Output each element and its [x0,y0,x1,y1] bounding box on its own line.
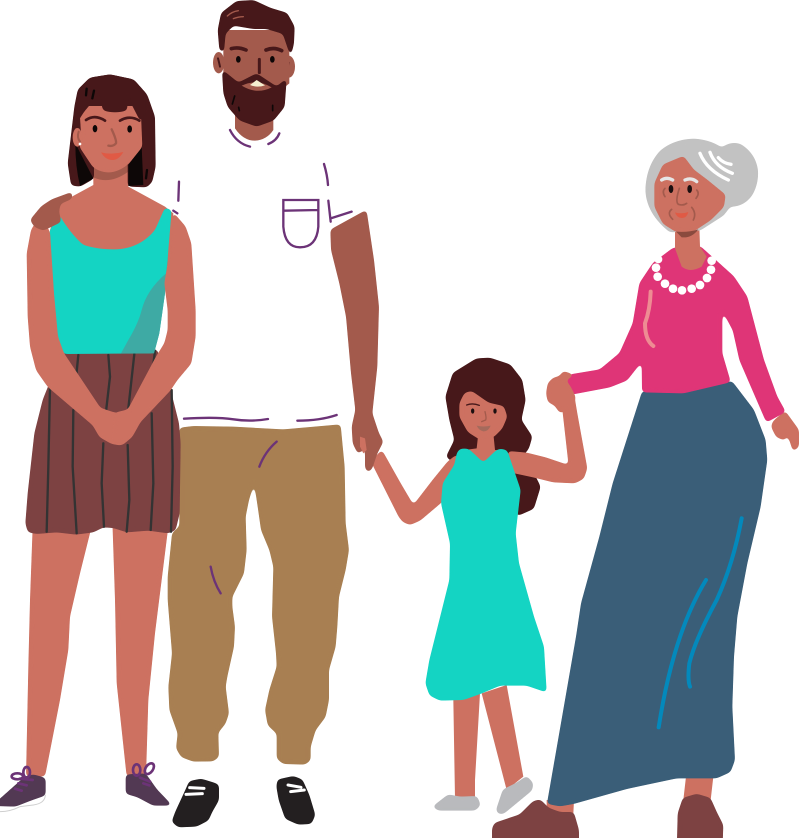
striped skirt [26,350,180,534]
teal top [49,207,172,354]
woman nose [108,129,116,146]
hair highlights [227,11,243,19]
grandmother eyes [669,185,692,193]
girl legs [453,685,523,798]
man shoes [172,777,315,827]
figure: woman [0,75,195,812]
ear detail [78,132,80,142]
man eyes [236,56,275,63]
neck shadow [93,163,128,180]
blouse fold [645,292,653,346]
teal dress [426,449,546,700]
man mouth [242,82,272,91]
shirt pocket and seams [173,130,352,247]
top shadow [121,253,168,353]
man arm and hand [331,211,383,472]
girl hair [446,358,540,515]
beard marks [232,96,273,111]
man neck [235,110,273,141]
woman mouth [101,152,123,160]
grandmother face [655,157,725,232]
earring [79,143,81,145]
girl face [460,392,507,440]
chin shadow [676,229,698,237]
beige trousers [168,425,348,764]
woman ear [73,128,82,147]
woman left arm [27,217,130,445]
pearl necklace [652,255,716,295]
shoe sole [0,795,45,812]
girl shoes [433,777,533,813]
grandmother mouth [675,212,688,218]
woman fringe [74,75,147,127]
girl mouth [477,426,491,431]
woman brows [86,117,139,121]
white t-shirt [177,133,366,428]
grandmother hand [772,412,798,451]
woman right arm [112,213,195,445]
woman face [80,107,142,172]
shirt hem lines [184,415,337,421]
girl's fingers in man's hand [360,437,367,453]
hair marks [86,89,147,178]
skirt fold lines [659,518,742,727]
grandmother legs [547,777,713,814]
girl eyes [471,408,497,414]
man teeth [250,80,265,87]
trouser creases [211,442,277,593]
man face [223,30,289,110]
girl arm holding grandmother [508,393,587,483]
grandmother shoes [493,794,723,838]
dark inner hair [75,143,143,186]
grandmother neck [675,227,707,270]
man beard [223,71,286,126]
shoe laces [186,785,304,794]
pink blouse [565,247,785,422]
woman eyes [93,125,132,133]
girl arm reaching man [372,451,458,524]
figure: girl [372,358,587,813]
girl neck [460,433,507,467]
man nose [255,59,264,73]
hair strands [662,152,732,182]
clasped hand [547,372,575,412]
skirt stripes [47,351,173,533]
girl brows and nose [467,404,479,405]
figure: man [168,1,383,827]
man ears [213,52,295,78]
woman neck and chest [50,160,173,267]
man hair [218,1,294,55]
man brows [231,48,282,51]
grandmother skirt [548,382,767,806]
woman legs [26,520,168,777]
woman shoes [0,774,171,806]
woman hair back [68,75,155,187]
grey hair [646,139,757,232]
nose and wrinkles [663,188,698,220]
shoe laces [12,762,156,791]
man's hand on shoulder [31,193,72,230]
figure: grandmother [493,139,798,838]
